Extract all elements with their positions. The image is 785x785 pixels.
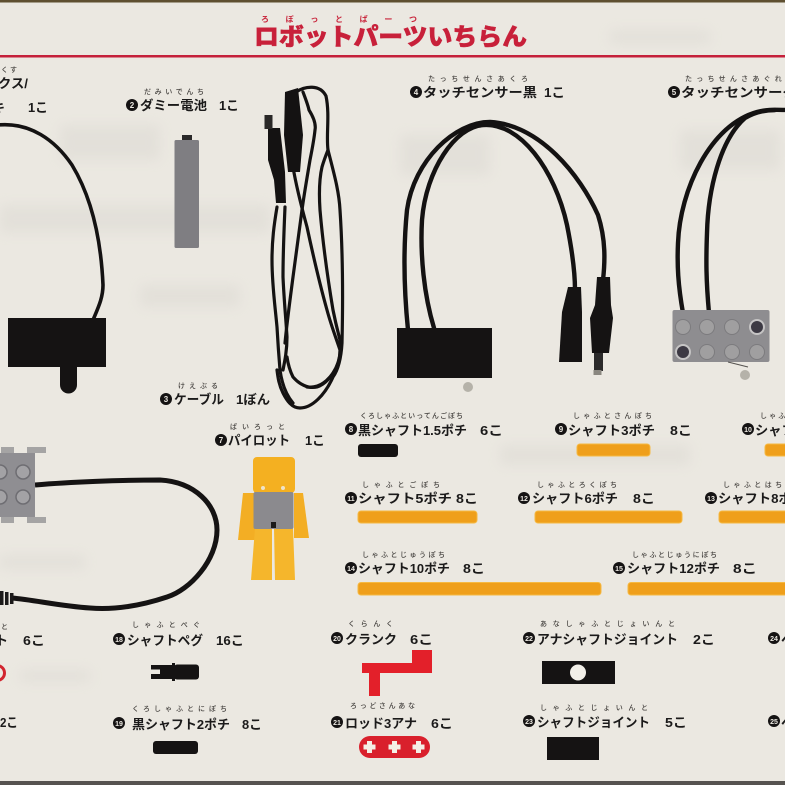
label 18: シャフトペグ bbox=[127, 633, 203, 648]
label 7: ぱいろっと bbox=[230, 423, 285, 431]
label 3: ケーブル bbox=[174, 392, 224, 407]
label 12: 8こ bbox=[633, 491, 655, 506]
part 9: shaft bbox=[577, 444, 650, 456]
label 2: 2 bbox=[130, 101, 135, 110]
part 6: grey brick with cable bbox=[0, 447, 217, 609]
label 14 bbox=[345, 551, 485, 576]
label 9: しゃふとさんぽち bbox=[573, 412, 652, 420]
part 2: dummy battery bbox=[174, 135, 199, 248]
label 20: 6こ bbox=[410, 632, 433, 647]
label 14: しゃふとじゅうぽち bbox=[362, 551, 445, 559]
label 15: しゃふとじゅうにぽち bbox=[632, 551, 717, 559]
label 13 bbox=[705, 481, 785, 506]
label 20: 20 bbox=[333, 636, 341, 643]
label 9: シャフト3ポチ bbox=[568, 423, 655, 438]
label 9: 9 bbox=[559, 425, 564, 434]
part 12: shaft bbox=[535, 511, 682, 523]
label 15 bbox=[613, 551, 757, 576]
part 8: black shaft bbox=[358, 444, 398, 457]
label 2: ダミー電池 bbox=[140, 98, 207, 113]
label 19 bbox=[113, 705, 262, 732]
label 11: 8こ bbox=[456, 491, 478, 506]
label 4: たっちせんさあくろ bbox=[428, 75, 528, 83]
part 21: red rod with three holes bbox=[359, 736, 430, 758]
part 5: grey touch sensor bbox=[672, 110, 785, 380]
part 18: shaft peg bbox=[151, 663, 199, 681]
label 11 bbox=[345, 480, 478, 506]
label 1: clipped heading: くす bbox=[1, 66, 17, 74]
label 23: 5こ bbox=[665, 715, 687, 730]
label 14: シャフト10ポチ bbox=[358, 561, 450, 576]
label 7: パイロット bbox=[228, 433, 290, 448]
label 3: 1ぼん bbox=[236, 392, 270, 407]
label 11: シャフト5ポチ bbox=[358, 491, 452, 506]
label 21 bbox=[331, 701, 453, 731]
label 5 bbox=[668, 75, 785, 100]
label 13: 13 bbox=[707, 496, 715, 503]
label 4 bbox=[410, 75, 565, 100]
label 19: 19 bbox=[115, 721, 123, 728]
label 1: clipped heading bbox=[0, 66, 48, 115]
label 3: けえぶる bbox=[178, 382, 218, 390]
label 10 bbox=[742, 412, 785, 438]
label 3 bbox=[160, 382, 270, 407]
part 23: shaft joint bbox=[547, 737, 599, 760]
label 24: clipped: 24 bbox=[770, 636, 778, 643]
part 3: coiled cable bbox=[264, 87, 343, 408]
label 23: しゃふとじょいんと bbox=[540, 704, 648, 712]
label 21: 6こ bbox=[431, 716, 453, 731]
label 14: 8こ bbox=[463, 561, 485, 576]
part 10: shaft bbox=[765, 444, 785, 456]
label 17: clipped: 2こ bbox=[0, 715, 18, 730]
label 22: アナシャフトジョイント bbox=[537, 632, 678, 647]
label 23: シャフトジョイント bbox=[537, 715, 650, 730]
label 16: clipped bbox=[0, 623, 45, 648]
part 20: red crank bbox=[362, 650, 432, 696]
part 19: black shaft bbox=[153, 741, 198, 754]
label 22 bbox=[523, 620, 715, 647]
label 21: ロッド3アナ bbox=[345, 716, 417, 731]
label 18: 18 bbox=[115, 637, 123, 644]
label 21: ろっどさんあな bbox=[350, 701, 415, 710]
label 12: シャフト6ポチ bbox=[532, 491, 618, 506]
part 1: black box with wire bbox=[0, 125, 106, 394]
label 22: 22 bbox=[525, 636, 533, 643]
label 8: 6こ bbox=[480, 423, 503, 438]
label 20: くらんく bbox=[348, 620, 393, 628]
label 22: 2こ bbox=[693, 632, 715, 647]
label 18: しゃふとぺぐ bbox=[132, 621, 200, 629]
label 16: clipped: 6こ bbox=[23, 633, 45, 648]
label 18: 16こ bbox=[216, 633, 244, 648]
label 20 bbox=[331, 620, 433, 647]
part 16: red ring bbox=[0, 666, 4, 680]
label 5: 5 bbox=[672, 88, 677, 97]
part 11: shaft bbox=[358, 511, 477, 523]
part 15: shaft bbox=[628, 582, 785, 595]
label 14: 14 bbox=[347, 566, 355, 573]
label 3: 3 bbox=[164, 395, 169, 404]
label 1: clipped heading: 1こ bbox=[28, 100, 48, 115]
title: ろぼっとぱーつ bbox=[261, 14, 417, 24]
label 5: タッチセンサーグ bbox=[681, 85, 785, 100]
label 15: 8こ bbox=[733, 561, 757, 576]
label 12: 12 bbox=[520, 496, 528, 503]
label 21: 21 bbox=[333, 720, 341, 727]
label 10: 10 bbox=[744, 427, 752, 434]
label 16: clipped: と bbox=[1, 623, 8, 631]
label 15: 15 bbox=[615, 566, 623, 573]
label 8 bbox=[345, 411, 503, 438]
part 4: black touch sensor bbox=[397, 122, 613, 392]
label 9: 8こ bbox=[670, 423, 692, 438]
label 2 bbox=[126, 88, 239, 113]
label 7: 7 bbox=[219, 436, 224, 445]
label 4: 1こ bbox=[544, 85, 565, 100]
label 12: しゃふとろくぽち bbox=[537, 481, 617, 489]
title: ロボットパーツいちらん bbox=[254, 24, 527, 51]
part 7: pilot figure bbox=[238, 457, 309, 580]
label 9 bbox=[555, 412, 692, 438]
label 23 bbox=[523, 704, 687, 730]
part 22: shaft joint with hole bbox=[542, 661, 615, 684]
label 2: 1こ bbox=[219, 98, 239, 113]
label 23: 23 bbox=[525, 719, 533, 726]
label 22: あなしゃふとじょいんと bbox=[540, 620, 675, 628]
label 8: 8 bbox=[349, 425, 354, 434]
label 25: clipped bbox=[768, 715, 785, 730]
label 11: しゃふとごぽち bbox=[362, 480, 440, 489]
label 8: くろしゃふといってんごぽち bbox=[360, 411, 463, 420]
label 2: だみいでんち bbox=[144, 88, 204, 96]
label 18 bbox=[113, 621, 244, 648]
label 4: タッチセンサー黒 bbox=[423, 85, 537, 100]
label 8: 黒シャフト1.5ポチ bbox=[358, 423, 467, 438]
label 19: 8こ bbox=[242, 717, 262, 732]
red title rule bbox=[0, 55, 785, 58]
label 4: 4 bbox=[414, 88, 419, 97]
label 12 bbox=[518, 481, 655, 506]
label 24: clipped bbox=[768, 632, 785, 647]
label 19: 黒シャフト2ポチ bbox=[132, 717, 230, 732]
label 7 bbox=[215, 423, 325, 448]
label 15: シャフト12ポチ bbox=[627, 561, 720, 576]
label 11: 11 bbox=[347, 496, 355, 503]
label 19: くろしゃふとにぽち bbox=[132, 705, 227, 713]
label 20: クランク bbox=[345, 632, 397, 647]
part 14: shaft bbox=[358, 582, 601, 595]
part 13: shaft bbox=[719, 511, 785, 523]
label 25: clipped: 25 bbox=[770, 719, 778, 726]
label 7: 1こ bbox=[305, 433, 325, 448]
